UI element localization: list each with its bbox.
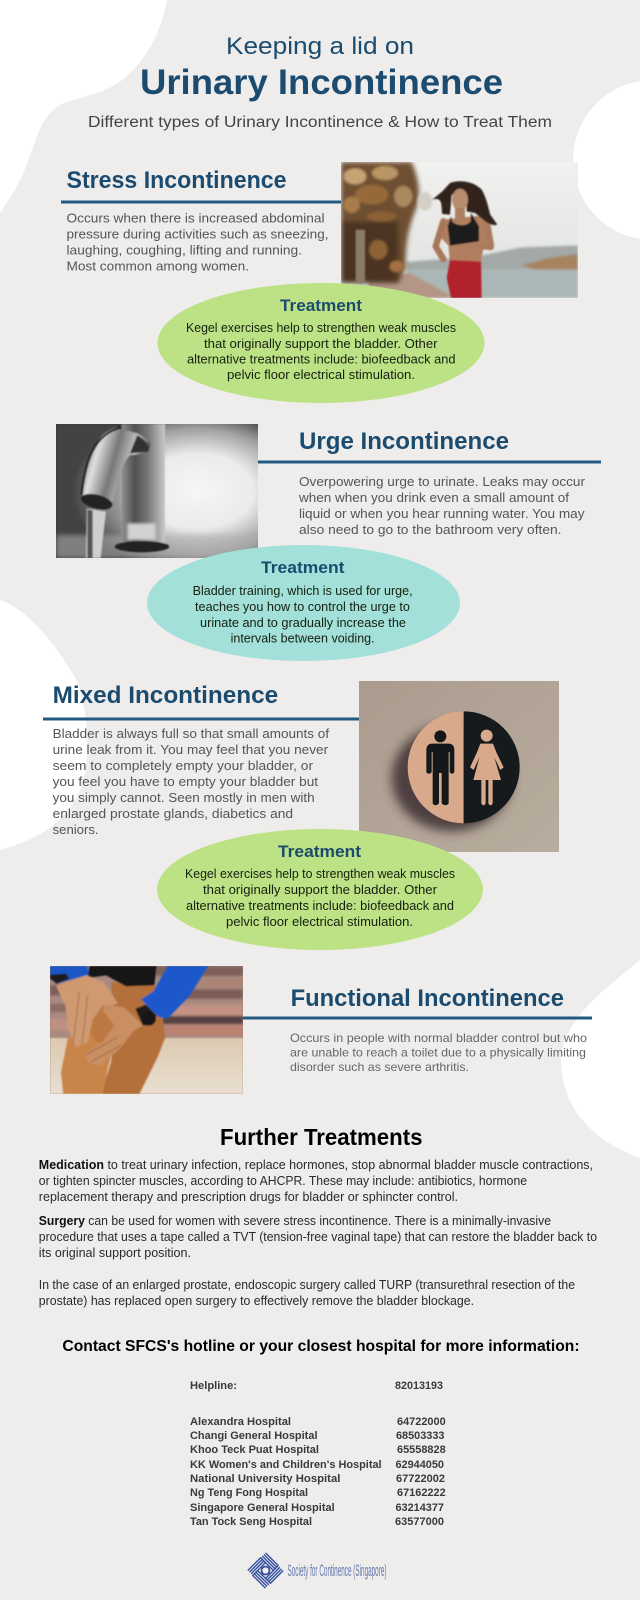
- photo: restroom sign: [359, 681, 559, 852]
- description: mixed: Bladder is always full so that small amounts of: [53, 726, 329, 741]
- description: urge: [298, 474, 586, 537]
- description: functional: [290, 1031, 587, 1074]
- text block: prostate surgery: [39, 1278, 575, 1308]
- hospital list: 63214377: [396, 1502, 444, 1514]
- treatment text: stress: that originally support the bladder. Other: [204, 337, 438, 351]
- description: stress: [66, 211, 328, 274]
- treatment text: mixed: Kegel exercises help to strengthen weak muscles: [185, 867, 455, 881]
- hospital list: 62944050: [396, 1459, 444, 1471]
- text block: surgery: [39, 1214, 597, 1260]
- hospital list: 67162222: [397, 1487, 446, 1499]
- hospital list: 65558828: [397, 1444, 446, 1456]
- description: stress: Most common among women.: [66, 259, 249, 274]
- treatment text: stress: pelvic floor electrical stimulation.: [227, 368, 415, 382]
- hospital list: National University Hospital: [190, 1473, 340, 1485]
- text block: prostate surgery: prostate) has replaced open surgery to effectively remove the bladder blockage.: [39, 1294, 474, 1308]
- hospital list: KK Women's and Children's Hospital: [190, 1459, 382, 1471]
- text block: medication: or tighten spincter muscles, according to AHCPR. These may include: antibiotics, hormone: [39, 1174, 527, 1188]
- treatment text: urge: teaches you how to control the urge to: [195, 600, 410, 614]
- description: mixed: seem to completely empty your bladder, or: [53, 758, 314, 773]
- helpline row: [190, 1380, 443, 1392]
- description: functional: disorder such as severe arthritis.: [290, 1060, 469, 1074]
- description: urge: liquid or when you hear running water. You may: [299, 506, 585, 521]
- hospital list: Tan Tock Seng Hospital: [190, 1516, 312, 1528]
- hospital list: 64722000: [397, 1416, 446, 1428]
- main title: Urinary Incontinence: [140, 63, 503, 102]
- description: mixed: you feel you have to empty your bladder but: [53, 774, 319, 789]
- panel: functional incontinence: [50, 966, 592, 1094]
- panel: mixed incontinence: [43, 681, 559, 950]
- contact heading: Contact SFCS's hotline or your closest hospital for more information:: [62, 1338, 580, 1355]
- hospital list: Singapore General Hospital: [190, 1502, 335, 1514]
- treatment text: urge: intervals between voiding.: [231, 632, 375, 646]
- treatment text: stress: alternative treatments include: biofeedback and: [187, 352, 456, 366]
- treatment text: urge: Bladder training, which is used for urge,: [193, 584, 413, 598]
- description: stress: pressure during activities such as sneezing,: [66, 227, 328, 242]
- treatment label: urge: Treatment: [261, 558, 345, 577]
- description: functional: Occurs in people with normal bladder control but who: [290, 1031, 587, 1045]
- heading rule: functional: [243, 1016, 592, 1020]
- heading: urge: Urge Incontinence: [299, 428, 509, 455]
- hospital list: Changi General Hospital: [190, 1430, 318, 1442]
- treatment ellipse: stress: [158, 283, 484, 403]
- treatment text: stress: [186, 321, 456, 382]
- treatment ellipse: mixed: [157, 829, 483, 950]
- icon: man: [426, 730, 454, 805]
- heading: stress: Stress Incontinence: [66, 167, 286, 194]
- text block: medication: replacement therapy and prescription drugs for bladder or sphincter control.: [39, 1190, 458, 1204]
- hospital list: 67722002: [396, 1473, 445, 1485]
- text block: surgery: Surgery can be used for women with severe stress incontinence. There is a minimally-invasive: [39, 1214, 551, 1228]
- hospital list: Khoo Teck Puat Hospital: [190, 1444, 319, 1456]
- treatment text: urge: [193, 584, 413, 646]
- title block: [88, 33, 552, 131]
- icon: logo mark: [248, 1553, 283, 1588]
- heading: mixed: Mixed Incontinence: [53, 682, 278, 709]
- heading rule: mixed: [43, 718, 359, 720]
- description: mixed: enlarged prostate glands, diabetics and: [53, 806, 293, 821]
- treatment label: stress: Treatment: [280, 296, 362, 315]
- description: mixed: [53, 726, 329, 837]
- panel: urge incontinence: [56, 424, 601, 661]
- section: contact: [62, 1338, 580, 1528]
- description: urge: Overpowering urge to urinate. Leaks may occur: [299, 474, 586, 489]
- text block: medication: [39, 1158, 593, 1204]
- hospital list: 63577000: [395, 1516, 444, 1528]
- description: stress: laughing, coughing, lifting and running.: [66, 243, 302, 258]
- text block: surgery: procedure that uses a tape called a TVT (tension-free vaginal tape) that can restore the bladder back to: [39, 1230, 597, 1244]
- description: mixed: you simply cannot. Seen mostly in men with: [53, 790, 315, 805]
- helpline row: Helpline:: [190, 1380, 237, 1392]
- photo: dripping tap: [56, 424, 258, 558]
- text block: prostate surgery: In the case of an enlarged prostate, endoscopic surgery called TURP (transurethral resection of the: [39, 1278, 575, 1292]
- helpline row: 82013193: [395, 1380, 443, 1392]
- photo: person holding knee: [50, 966, 243, 1094]
- description: mixed: seniors.: [53, 822, 99, 837]
- section: further treatments: [39, 1124, 597, 1308]
- hospital list: 68503333: [396, 1430, 444, 1442]
- treatment text: urge: urinate and to gradually increase the: [200, 616, 406, 630]
- hospital list: [190, 1416, 446, 1528]
- panel: stress incontinence: [61, 162, 578, 403]
- heading: functional: Functional Incontinence: [291, 985, 564, 1012]
- heading rule: urge: [258, 460, 601, 464]
- logo: society for continence singapore: [248, 1553, 386, 1588]
- text block: medication: Medication to treat urinary infection, replace hormones, stop abnormal bladder muscle contractions,: [39, 1158, 593, 1172]
- description: urge: also need to go to the bathroom very often.: [299, 522, 562, 537]
- description: urge: when when you drink even a small amount of: [298, 490, 569, 505]
- treatment text: mixed: pelvic floor electrical stimulation.: [226, 915, 413, 929]
- heading rule: stress: [61, 200, 341, 204]
- background blobs: [0, 0, 640, 1158]
- title kicker: Keeping a lid on: [226, 33, 414, 60]
- heading: further treatments: Further Treatments: [220, 1124, 422, 1150]
- treatment label: mixed: Treatment: [278, 842, 361, 861]
- subtitle: Different types of Urinary Incontinence & How to Treat Them: [88, 114, 552, 131]
- description: mixed: urine leak from it. You may feel that you never: [53, 742, 329, 757]
- icon: woman: [470, 730, 504, 805]
- infographic: urinary incontinence: Society for Continence (Singapore): [288, 1562, 386, 1580]
- treatment text: stress: Kegel exercises help to strengthen weak muscles: [186, 321, 456, 335]
- photo: woman running: [341, 162, 578, 298]
- hospital list: Ng Teng Fong Hospital: [190, 1487, 308, 1499]
- text block: surgery: its original support position.: [39, 1246, 191, 1260]
- treatment text: mixed: alternative treatments include: biofeedback and: [186, 899, 454, 913]
- treatment text: mixed: [185, 867, 455, 929]
- treatment text: mixed: that originally support the bladder. Other: [203, 883, 437, 897]
- hospital list: Alexandra Hospital: [190, 1416, 291, 1428]
- description: functional: are unable to reach a toilet due to a physically limiting: [290, 1046, 586, 1060]
- description: stress: Occurs when there is increased abdominal: [66, 211, 325, 226]
- treatment ellipse: urge: [147, 545, 460, 661]
